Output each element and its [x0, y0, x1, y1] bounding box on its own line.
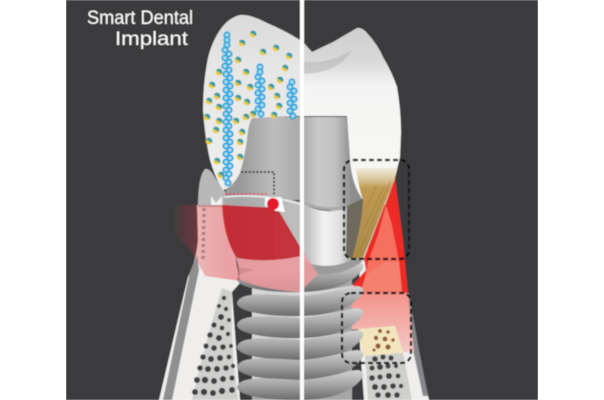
dashed callout: chip region	[241, 172, 274, 195]
dashed callout: bone loss region	[342, 293, 411, 363]
left abutment	[224, 117, 300, 272]
left cancellous bone	[192, 288, 238, 400]
dashed callout: plaque region	[344, 160, 409, 259]
exposed bone defect	[358, 326, 403, 356]
red sensing fan	[175, 205, 318, 292]
red inflamed tissue	[350, 178, 414, 352]
right abutment	[304, 117, 363, 274]
title: Implant	[115, 29, 189, 50]
title: Smart Dental	[87, 8, 193, 29]
center divider	[300, 0, 304, 400]
blue nanoparticle columns	[222, 32, 297, 186]
background panels	[66, 0, 538, 400]
right cancellous bone	[365, 352, 412, 400]
plaque deposit	[346, 168, 398, 258]
right crown	[304, 28, 401, 205]
right gum and bone	[358, 178, 429, 400]
sensor chip with red LED	[225, 194, 285, 212]
left gum and bone	[159, 169, 240, 400]
implant screw threads	[237, 262, 363, 400]
left crown	[203, 15, 300, 190]
yellow and teal bacteria dots	[204, 31, 292, 178]
title	[87, 8, 193, 50]
